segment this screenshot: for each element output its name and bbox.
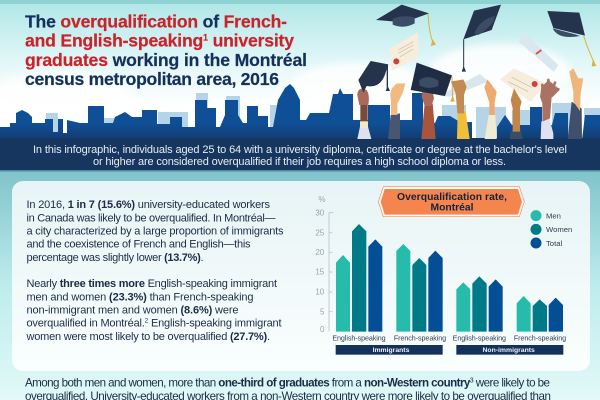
chart axis: 10 <box>315 287 325 296</box>
intro text: or higher are considered overqualified if their job requires a high school diploma or less. <box>93 156 506 168</box>
text block: bottom paragraph <box>25 376 551 400</box>
title: graduates working in the Montréal <box>25 50 307 70</box>
legend <box>530 210 572 248</box>
chart axis: 5 <box>320 307 325 316</box>
text block: bottom paragraph: Among both men and women, more than one-third of graduates from a non-Western country <box>25 376 470 390</box>
title: The overqualification of French- <box>25 12 287 32</box>
category labels: French-speaking <box>394 334 446 342</box>
icon: diploma top <box>389 32 419 71</box>
raised arm 7 <box>540 80 558 139</box>
chart axis: 0 <box>320 325 325 334</box>
text block: left column: In 2016, 1 in 7 (15.6%) university-educated workers <box>26 199 270 211</box>
skyline, front layer <box>0 84 600 140</box>
icon: rolled diploma behind hand <box>438 74 488 97</box>
chart axis: 20 <box>315 248 325 257</box>
text block: left column: English-speaking immigrant <box>148 318 282 330</box>
lower background <box>0 170 600 400</box>
bars: French-speaking immigrants <box>396 244 443 332</box>
group label: immigrants <box>336 345 443 355</box>
text block: left column: women were most likely to be overqualified (27.7%). <box>26 331 270 343</box>
text block: left column: percentage was slightly lower (13.7%). <box>26 252 204 264</box>
icon: rolled diploma <box>519 33 558 72</box>
text block: bottom paragraph: 3 <box>470 378 474 384</box>
title <box>25 12 307 89</box>
legend: Men <box>546 211 561 220</box>
icon: graduation scene <box>357 5 597 139</box>
chart axis: 30 <box>315 208 325 217</box>
text block: left column: and the coexistence of French and English—this <box>26 239 251 251</box>
header sky background <box>0 0 600 140</box>
bars: French-speaking non-immigrants <box>517 296 563 332</box>
intro text <box>33 144 567 168</box>
legend: Women <box>546 225 572 234</box>
text block: left column: a city characterized by a large proportion of immigrants <box>26 226 284 238</box>
title: census metropolitan area, 2016 <box>25 69 279 89</box>
text block: left column: men and women (23.3%) than French-speaking <box>26 291 254 303</box>
text block: left column: non-immigrant men and women (8.6%) were <box>26 304 238 316</box>
bars: English-speaking non-immigrants <box>456 276 503 332</box>
raised arm 8 <box>568 68 583 139</box>
bar chart <box>315 187 572 355</box>
raised arm 4 <box>451 79 470 139</box>
icon: diploma right <box>500 68 546 102</box>
text block: left column: Nearly three times more English-speaking immigrant <box>26 278 277 290</box>
text block: left column <box>26 199 284 343</box>
raised arm 6 holding diploma <box>510 88 523 139</box>
category labels <box>332 334 566 342</box>
group label: non-immigrants: Non-immigrants <box>482 347 535 354</box>
chart axis: 25 <box>315 228 325 237</box>
category labels: French-speaking <box>514 334 566 342</box>
raised arm 1 with cap <box>357 61 390 139</box>
text block: left column: 2 <box>145 318 149 325</box>
text block: bottom paragraph: were likely to be <box>473 376 550 390</box>
group label: immigrants: Immigrants <box>373 347 410 354</box>
chart title: Montréal <box>430 203 474 214</box>
chart title: Overqualification rate, <box>397 192 507 203</box>
chart axis: 15 <box>315 268 325 277</box>
title: and English-speaking <box>25 30 203 50</box>
icon: cap top left <box>376 5 436 46</box>
dark skyline band <box>0 138 600 170</box>
raised arm 3 with cap <box>411 63 455 139</box>
title: university <box>208 30 294 50</box>
text block: left column: overqualified in Montréal. <box>26 318 145 330</box>
legend: Total <box>546 239 562 248</box>
category labels: English-speaking <box>453 334 506 342</box>
group label: non-immigrants <box>456 345 563 355</box>
panel: main card <box>12 181 590 371</box>
raised arm 5 <box>484 79 497 139</box>
text block: left column: in Canada was likely to be overqualified. In Montréal— <box>26 212 276 224</box>
intro text: In this infographic, individuals aged 25 to 64 with a university diploma, certificate or degree at the bachelor's level <box>33 144 567 156</box>
raised arm 2 <box>388 83 405 139</box>
category labels: English-speaking <box>332 334 386 342</box>
skyline, back layer <box>46 93 600 140</box>
title: 1 <box>203 32 208 42</box>
chart title <box>378 187 524 217</box>
icon: cap top right <box>547 11 597 66</box>
chart axis <box>315 195 333 334</box>
bars: English-speaking immigrants <box>336 224 382 332</box>
icon: cap top centre <box>462 5 501 72</box>
chart axis: % <box>318 195 325 204</box>
